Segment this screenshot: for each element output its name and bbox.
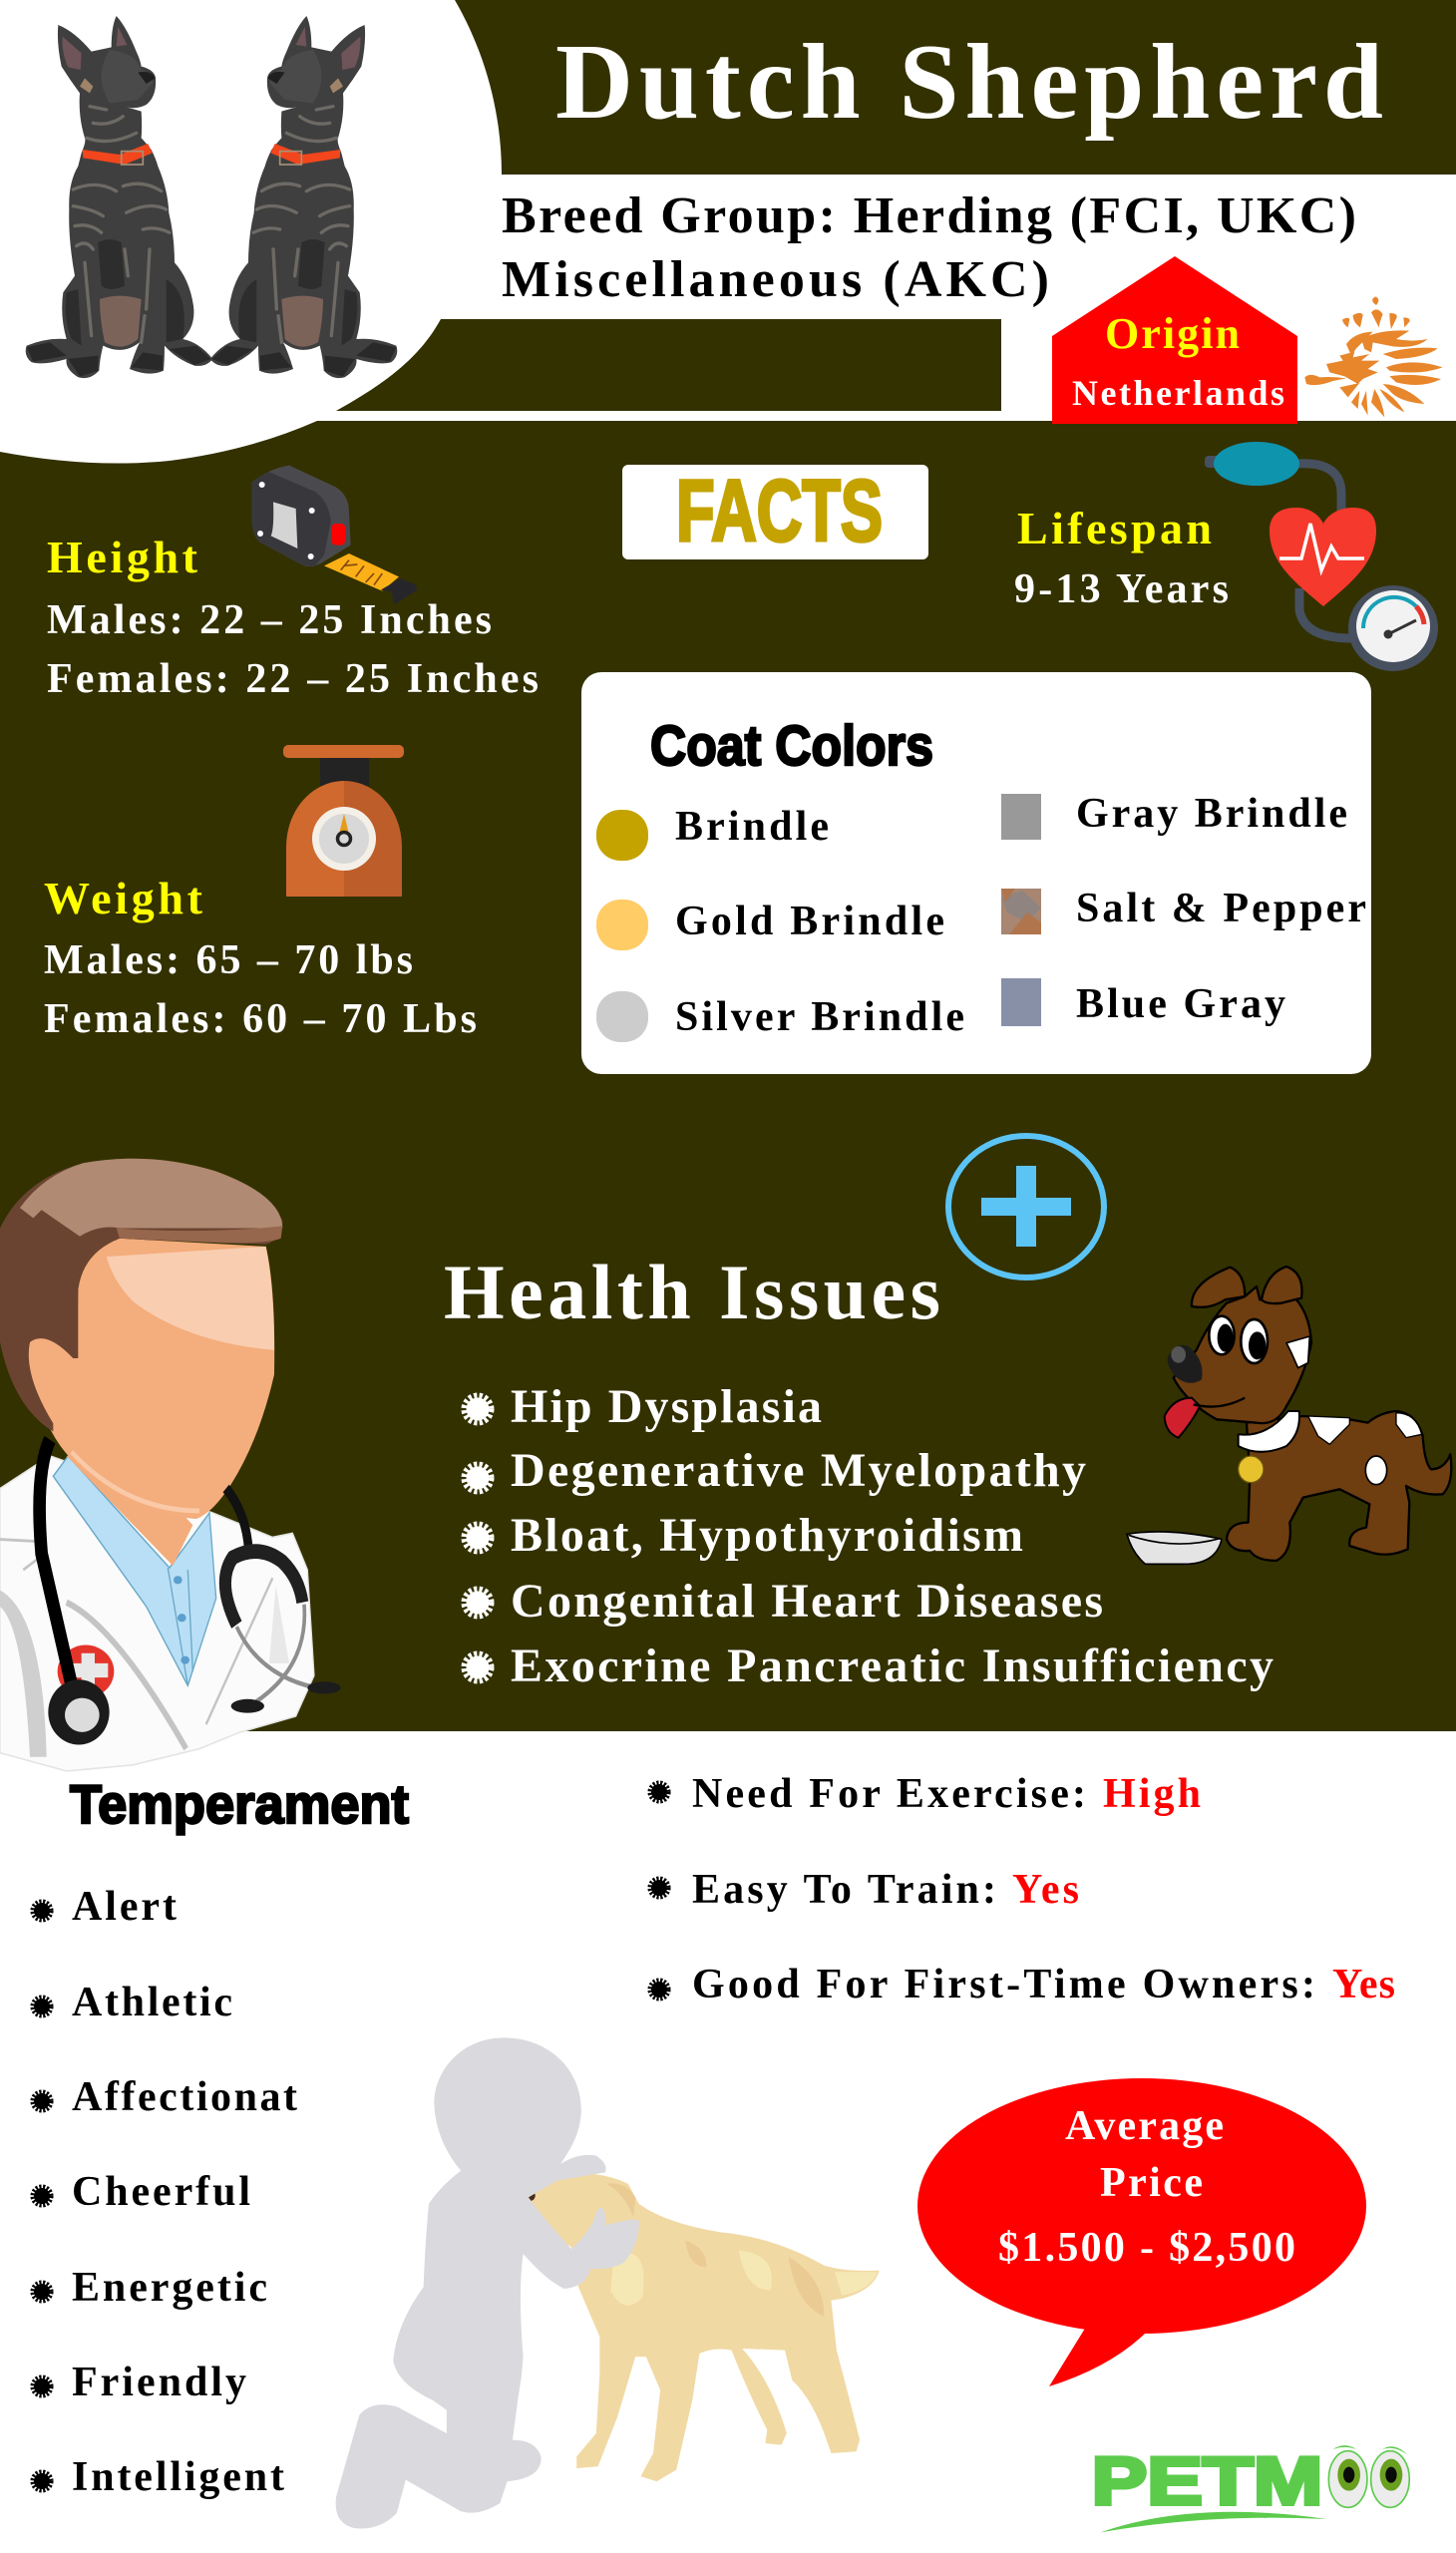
bullet item: heart diseases: Congenital Heart Diseases [511, 1575, 1103, 1628]
swatch: gold brindle [596, 900, 648, 950]
title: Dutch Shepherd [555, 23, 1383, 142]
swatch: gray brindle [1001, 794, 1041, 840]
health issues heading: Health Issues [444, 1249, 940, 1335]
item: athletic: Athletic [72, 1980, 232, 2025]
image: doctor with stethoscope [0, 1159, 341, 1771]
origin house badge: Netherlands [1072, 373, 1284, 413]
item: first-time owners: Good For First-Time Owners: [692, 1962, 1315, 2007]
swatch: brindle [596, 810, 648, 861]
weight females: Females: 60 – 70 Lbs [44, 996, 477, 1042]
label: salt and pepper: Salt & Pepper [1076, 886, 1366, 931]
icon: tape measure [252, 466, 417, 605]
item: intelligent: Intelligent [72, 2454, 284, 2500]
item: need for exercise: High [1103, 1771, 1201, 1817]
item: first-time owners: Yes [1332, 1962, 1395, 2007]
item: easy to train: Yes [1012, 1867, 1079, 1913]
item: need for exercise: Need For Exercise: [692, 1771, 1086, 1817]
text: miscellaneous group: Miscellaneous (AKC) [502, 251, 1049, 308]
icon: heart with blood pressure gauge [1205, 442, 1438, 671]
image: cartoon dog with bowl [1127, 1267, 1451, 1564]
panel: title banner [455, 0, 1456, 175]
item: affectionate clipped: Affectionat [72, 2074, 297, 2120]
bullet item: exocrine insufficiency: Exocrine Pancreatic Insufficiency [511, 1640, 1274, 1692]
icon: medical plus [948, 1136, 1104, 1277]
panel: coat colors [581, 672, 1371, 1074]
panel: dark strip under breed group [336, 319, 1001, 411]
label: gray brindle: Gray Brindle [1076, 791, 1347, 837]
item: easy to train: Easy To Train: [692, 1867, 996, 1913]
callout: average price bubble: Price [1100, 2160, 1203, 2206]
callout: average price bubble [917, 2078, 1366, 2386]
label: blue gray: Blue Gray [1076, 981, 1285, 1027]
item: energetic: Energetic [72, 2265, 267, 2311]
text: breed group: Breed Group: Herding (FCI, UKC) [502, 187, 1356, 244]
label: silver brindle: Silver Brindle [675, 994, 964, 1040]
bullet item: hip dysplasia: Hip Dysplasia [511, 1380, 822, 1433]
swatch: salt and pepper [1001, 889, 1041, 934]
swatch: silver brindle [596, 991, 648, 1042]
height males: Males: 22 – 25 Inches [47, 597, 492, 643]
swatch: blue gray [1001, 978, 1041, 1026]
list: health issues [465, 1380, 1274, 1692]
list: traits ratings [650, 1771, 1395, 2007]
facts label: FACTS [676, 463, 883, 559]
icon: dutch lion logo [1304, 296, 1443, 417]
item: friendly: Friendly [72, 2360, 246, 2405]
weight males: Males: 65 – 70 lbs [44, 937, 413, 983]
icon: weighing scale [283, 745, 404, 897]
temperament heading: Temperament [70, 1773, 409, 1835]
item: alert: Alert [72, 1884, 177, 1930]
height heading: Height [47, 532, 198, 582]
label: brindle: Brindle [675, 804, 829, 850]
background panel: main dark band [0, 421, 1456, 1731]
list: temperament [33, 1884, 297, 2500]
callout: average price bubble: Average [1065, 2103, 1224, 2149]
item: cheerful: Cheerful [72, 2169, 250, 2215]
weight heading: Weight [44, 873, 203, 923]
logo: petmoo [1092, 2443, 1409, 2532]
origin house badge [1052, 256, 1297, 424]
bullet item: degenerative myelopathy: Degenerative Myelopathy [511, 1444, 1086, 1497]
height females: Females: 22 – 25 Inches [47, 656, 539, 702]
image: figure hugging golden dog [336, 2037, 880, 2528]
label: gold brindle: Gold Brindle [675, 899, 944, 944]
lifespan value: 9-13 Years [1014, 566, 1229, 612]
bullet item: bloat: Bloat, Hypothyroidism [511, 1509, 1023, 1562]
callout: average price bubble: $1.500 - $2,500 [998, 2225, 1295, 2271]
logo: petmoo: PETM [1092, 2443, 1322, 2519]
lifespan heading: Lifespan [1017, 503, 1212, 553]
image: two dutch shepherd dogs [26, 16, 397, 378]
coat colors heading: Coat Colors [650, 714, 933, 778]
origin house badge: Origin [1105, 309, 1240, 358]
